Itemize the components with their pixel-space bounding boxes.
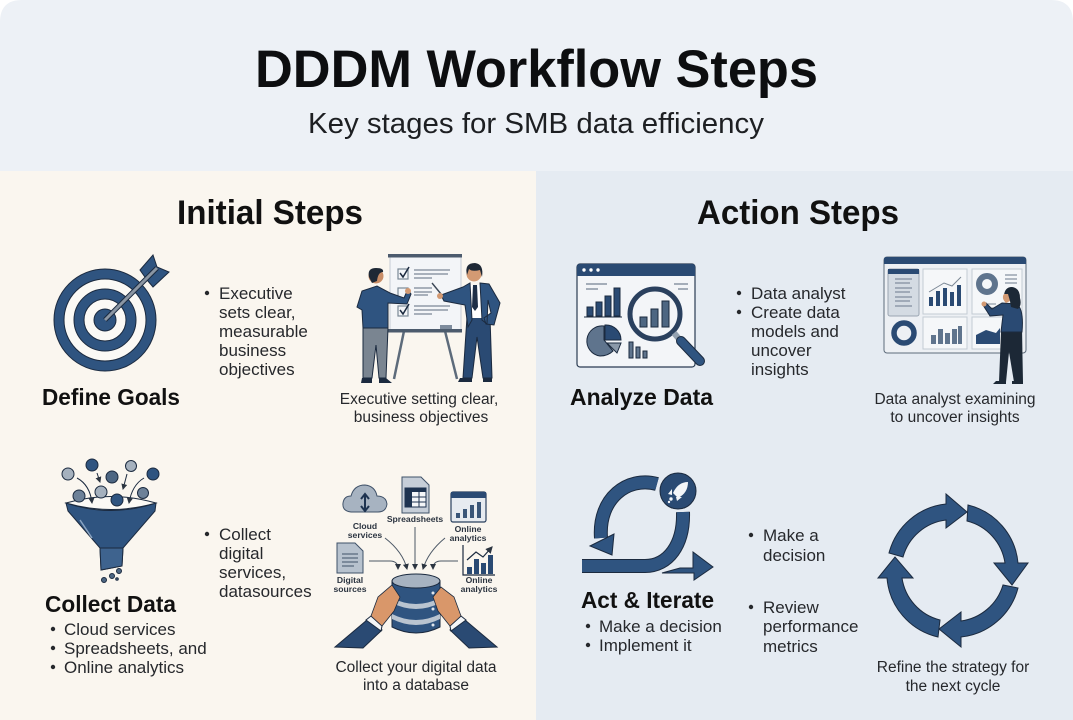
caption: collect data illustration: Collect your digital data — [335, 659, 497, 676]
text: collect data list — [51, 620, 207, 677]
text: act and iterate list: Make a decision — [599, 617, 722, 636]
text: analyze data bullets: models and — [751, 322, 839, 341]
text: decision bullets — [749, 526, 858, 656]
panel: initial steps — [0, 171, 536, 720]
icon: online analytics window: analytics — [450, 533, 487, 543]
label: define goals: Define Goals — [42, 384, 180, 410]
icon: cloud services — [343, 485, 387, 540]
icon: digital sources document: Digital — [337, 575, 363, 585]
icon: target with arrow — [54, 255, 169, 371]
arrow: top left — [889, 494, 967, 557]
caption: refine the strategy — [877, 659, 1029, 695]
text: collect bullet: datasources — [219, 582, 312, 601]
icon: digital sources document — [334, 543, 367, 594]
caption: analyze data illustration — [874, 391, 1036, 426]
text: define goals bullet: measurable — [219, 322, 308, 341]
caption: define goals illustration: business objectives — [354, 409, 488, 426]
caption: analyze data illustration: Data analyst examining — [874, 391, 1036, 408]
icon: cloud services: Cloud — [353, 521, 377, 531]
illustration: executives at flip board — [357, 254, 500, 383]
label: act and iterate: Act & Iterate — [581, 587, 714, 613]
arrow: bottom left — [878, 557, 940, 637]
database cylinder — [392, 574, 440, 633]
text: analyze data bullets: insights — [751, 360, 809, 379]
icon: analytics window with magnifier — [577, 264, 700, 367]
arrow: bottom right — [939, 585, 1018, 647]
text: analyze data bullets: Data analyst — [751, 284, 846, 303]
text: act and iterate list: Implement it — [599, 636, 692, 655]
text: collect data list: Cloud services — [64, 620, 176, 639]
caption: analyze data illustration: to uncover insights — [890, 409, 1020, 426]
heading: action steps: Action Steps — [697, 194, 899, 232]
caption: define goals illustration — [340, 391, 498, 426]
text: decision bullets: Review — [763, 598, 819, 617]
caption: collect data illustration — [335, 659, 497, 694]
text: collect bullet: digital — [219, 544, 263, 563]
icon: online analytics chart — [461, 545, 498, 594]
caption: define goals illustration: Executive setting clear, — [340, 391, 498, 408]
hands holding database — [335, 585, 497, 648]
text: define goals bullet: business — [219, 341, 286, 360]
caption: refine the strategy: Refine the strategy for — [877, 659, 1029, 676]
icon: digital sources document: sources — [334, 584, 367, 594]
icon: online analytics window: Online — [455, 524, 482, 534]
text: collect data list: Spreadsheets, and — [64, 639, 207, 658]
icon: spreadsheets — [387, 477, 443, 524]
text: decision bullets: Make a — [763, 526, 819, 545]
icon: data funnel — [62, 459, 159, 582]
icon: cloud services: services — [348, 530, 382, 540]
icon: online analytics chart: analytics — [461, 584, 498, 594]
text: analyze data bullets: uncover — [751, 341, 812, 360]
label: collect data: Collect Data — [45, 591, 176, 617]
text: collect data list: Online analytics — [64, 658, 184, 677]
text: analyze data bullets: Create data — [751, 303, 840, 322]
subtitle: Key stages for SMB data efficiency — [308, 108, 764, 140]
title: DDDM Workflow Steps — [255, 40, 818, 99]
icon: iterate loop arrows — [582, 473, 713, 580]
text: collect bullet: services, — [219, 563, 286, 582]
icon: spreadsheets: Spreadsheets — [387, 514, 443, 524]
text: decision bullets: decision — [763, 546, 825, 565]
illustration: analyst at dashboard — [884, 257, 1026, 384]
heading: initial steps: Initial Steps — [177, 194, 363, 232]
caption: collect data illustration: into a database — [363, 677, 469, 694]
text: collect bullet — [205, 525, 312, 601]
text: decision bullets: performance — [763, 617, 858, 636]
icon: cycle of four arrows — [878, 494, 1028, 647]
text: define goals bullet: Executive — [219, 284, 293, 303]
text: define goals bullet: sets clear, — [219, 303, 296, 322]
text: define goals bullet — [205, 284, 308, 379]
text: act and iterate list — [586, 617, 722, 655]
text: analyze data bullets — [737, 284, 846, 379]
text: define goals bullet: objectives — [219, 360, 295, 379]
caption: refine the strategy: the next cycle — [906, 678, 1000, 695]
header band — [0, 0, 1073, 171]
icon: online analytics chart: Online — [466, 575, 493, 585]
illustration: digital sources into database — [334, 477, 498, 648]
icon: online analytics window — [450, 492, 487, 543]
text: decision bullets: metrics — [763, 637, 818, 656]
label: analyze data: Analyze Data — [570, 384, 713, 410]
text: collect bullet: Collect — [219, 525, 271, 544]
panel: action steps — [536, 171, 1073, 720]
arrow: top right — [967, 505, 1028, 585]
